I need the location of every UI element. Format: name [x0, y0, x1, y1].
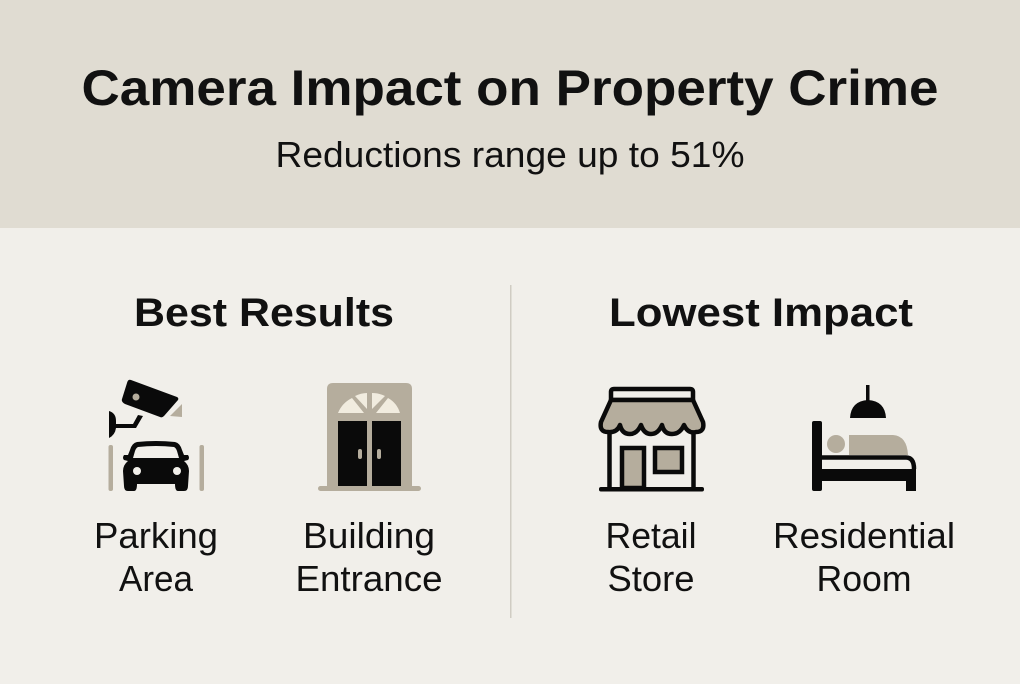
heading: best results: Best Results [134, 291, 394, 335]
label: parking area: Area [119, 558, 194, 599]
label: residential room: Residential [773, 515, 955, 556]
label: residential room [773, 515, 955, 599]
heading: lowest impact: Lowest Impact [609, 291, 913, 335]
title: Camera Impact on Property Crime [82, 60, 938, 116]
label: parking area [94, 515, 218, 599]
label: residential room: Room [816, 558, 912, 599]
label: retail store: Retail [606, 515, 696, 556]
label: retail store: Store [608, 558, 694, 599]
label: building entrance: Entrance [296, 558, 442, 599]
label: retail store [606, 515, 696, 599]
label: parking area: Parking [94, 515, 218, 556]
icon: residential room [812, 385, 916, 491]
label: building entrance [296, 515, 442, 599]
icon: building entrance [318, 383, 421, 491]
icon: retail store [599, 389, 704, 492]
subtitle: Reductions range up to 51% [276, 134, 744, 175]
label: building entrance: Building [303, 515, 435, 556]
header band [0, 0, 1020, 228]
icon: parking camera [108, 380, 204, 491]
